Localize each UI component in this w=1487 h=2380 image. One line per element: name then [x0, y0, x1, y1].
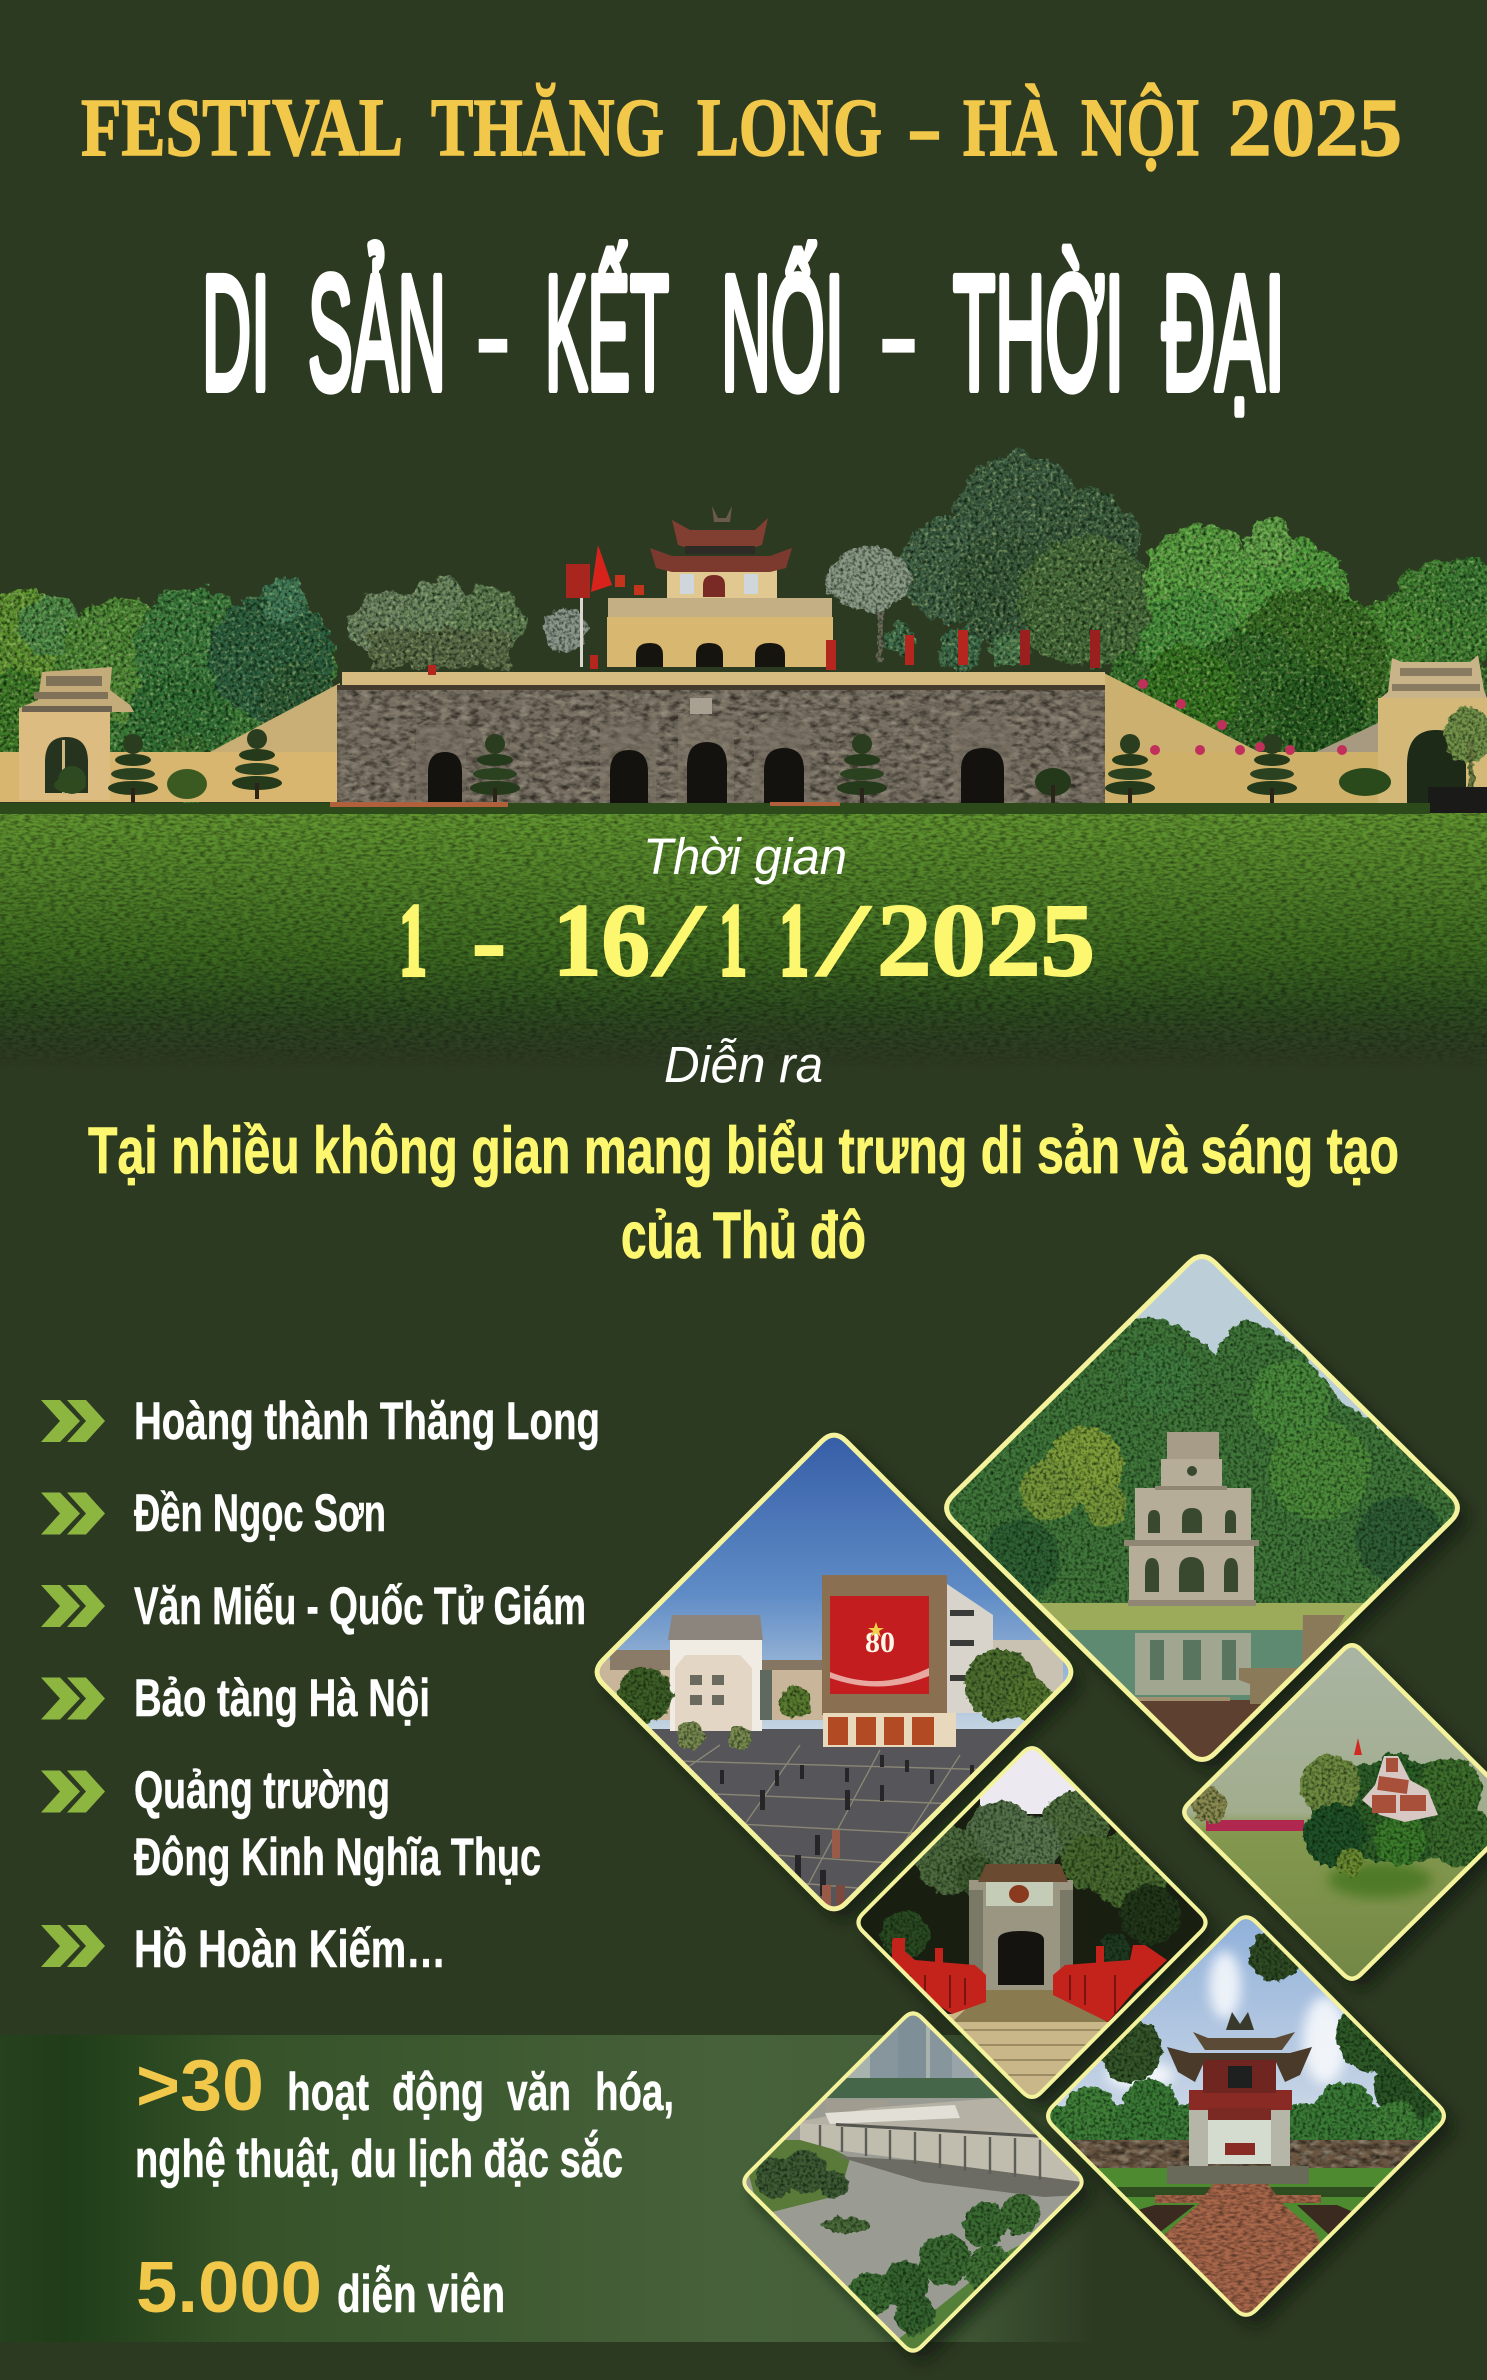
plaza trees	[617, 1649, 1052, 1750]
distant trees	[820, 2078, 1020, 2102]
item: Quảng trường Đông Kinh Nghĩa Thục	[41, 1761, 541, 1887]
pedestrians	[720, 1755, 974, 1896]
stat: 5.000 performers: 5.000	[136, 2248, 322, 2328]
photo diamond: Ngọc Sơn temple island	[1180, 1641, 1487, 1989]
hedge and flower bed	[0, 802, 1430, 814]
heading: Di sản - Kết nối - Thời đại: -	[474, 241, 512, 424]
label: Diễn ra: Diễn ra	[664, 1036, 823, 1093]
museum roof and facade	[800, 2098, 1039, 2137]
photo diamond: Turtle Tower on Hoàn Kiếm lake	[930, 1250, 1480, 1770]
item: Quảng trường Đông Kinh Nghĩa Thục: Quảng trường	[134, 1761, 390, 1820]
photo diamond: Thê Húc bridge and Ngọc Sơn gate	[854, 1744, 1215, 2107]
flags and banners	[428, 545, 1100, 675]
title: Festival Thăng Long - Hà Nội 2025: NỘI	[1081, 81, 1200, 173]
brick wall	[1043, 2140, 1449, 2168]
grass	[1043, 2168, 1449, 2328]
island trees	[1300, 1752, 1487, 1876]
heading: Di sản - Kết nối - Thời đại: DI	[202, 241, 270, 424]
topiary trees	[54, 729, 1391, 804]
photo diamond: Hà Nội Museum	[739, 2002, 1091, 2361]
date: 1 - 16/11/2025: 2025	[877, 883, 1095, 998]
venue statement	[88, 1113, 1399, 1272]
photo diamond: Đông Kinh Nghĩa Thục square	[591, 1429, 1080, 1919]
plaza pavement	[652, 1729, 1016, 1906]
date: 1 - 16/11/2025	[399, 883, 1095, 998]
stat: more than 30 activities: hoạt	[287, 2063, 369, 2122]
stat: 5.000 performers: diễn viên	[337, 2264, 505, 2324]
stats band background	[0, 2035, 1095, 2342]
citadel tower	[607, 506, 833, 667]
illustration: Thăng Long citadel and lawn	[0, 454, 1487, 1068]
date: 1 - 16/11/2025: 1	[779, 883, 809, 998]
tower reflection	[1135, 1633, 1251, 1695]
date: 1 - 16/11/2025: 1	[399, 883, 427, 998]
flags	[1354, 1738, 1362, 1755]
title: Festival Thăng Long - Hà Nội 2025: -	[907, 81, 942, 173]
item: Hồ Hoàn Kiếm: Hồ Hoàn Kiếm…	[134, 1920, 446, 1979]
high-rise towers	[870, 2010, 974, 2080]
stat: more than 30 activities: nghệ thuật, du lịch đặc sắc	[135, 2129, 623, 2189]
stat: more than 30 activities: hóa,	[595, 2063, 674, 2122]
venue statement: của Thủ đô	[621, 1198, 866, 1272]
item: Hoàng thành Thăng Long	[41, 1392, 600, 1451]
heading: Di sản - Kết nối - Thời đại: NỐI	[721, 241, 844, 424]
title: Festival Thăng Long - Hà Nội 2025: THĂNG	[431, 81, 664, 173]
red billboard	[830, 1596, 929, 1694]
dark box on right edge	[1428, 787, 1487, 817]
heading: Di sản - Kết nối - Thời đại	[202, 241, 1285, 424]
date: 1 - 16/11/2025: /	[652, 883, 706, 998]
stat: more than 30 activities: văn	[507, 2063, 571, 2122]
stat: more than 30 activities	[135, 2046, 674, 2189]
bridge deck	[854, 1990, 1210, 2102]
heading: Di sản - Kết nối - Thời đại: KẾT	[545, 241, 669, 424]
palm trees and lawn	[880, 2235, 1040, 2360]
item: Đền Ngọc Sơn	[41, 1484, 386, 1543]
side ramps and low walls	[210, 683, 340, 753]
title: Festival Thăng Long - Hà Nội 2025	[81, 81, 1402, 173]
item: Hoàng thành Thăng Long: Hoàng thành Thăng Long	[134, 1392, 600, 1451]
item: Đền Ngọc Sơn: Đền Ngọc Sơn	[134, 1484, 386, 1543]
item: Bảo tàng Hà Nội	[41, 1669, 430, 1728]
grass and trees on left	[739, 2140, 850, 2215]
magenta lanterns	[1138, 679, 1347, 755]
item: Bảo tàng Hà Nội: Bảo tàng Hà Nội	[134, 1669, 430, 1728]
pale sparse trees	[543, 546, 912, 662]
list of venues	[41, 1392, 600, 1979]
bridge	[1206, 1820, 1304, 1831]
stat: more than 30 activities: động	[392, 2063, 484, 2122]
title: Festival Thăng Long - Hà Nội 2025: FESTIVAL	[81, 81, 403, 173]
title: Festival Thăng Long - Hà Nội 2025: LONG	[697, 81, 882, 173]
red billboard: 80	[865, 1626, 895, 1659]
heading: Di sản - Kết nối - Thời đại: -	[877, 241, 920, 424]
gate	[969, 1880, 1073, 1993]
text: ĐẠI	[1162, 241, 1285, 424]
date: 1 - 16/11/2025: 16	[553, 883, 650, 998]
item: Văn Miếu - Quốc Tử Giám: Văn Miếu - Quốc Tử Giám	[134, 1577, 586, 1636]
turtle tower	[1124, 1432, 1259, 1606]
palm near right gate	[1444, 707, 1487, 795]
title: Festival Thăng Long - Hà Nội 2025: HÀ	[963, 81, 1057, 173]
arched gates in the wall	[428, 742, 1004, 805]
item: Quảng trường Đông Kinh Nghĩa Thục: Đông Kinh Nghĩa Thục	[134, 1828, 541, 1887]
white hotel building right	[947, 1584, 993, 1713]
shop front	[823, 1713, 956, 1747]
temple roofs	[1362, 1756, 1438, 1822]
heading: Di sản - Kết nối - Thời đại: SẢN	[308, 241, 446, 424]
item: Văn Miếu - Quốc Tử Giám	[41, 1577, 586, 1636]
pavilion	[1167, 2166, 1309, 2184]
right gate	[1378, 655, 1487, 803]
trees behind the citadel	[0, 454, 1487, 804]
left gate	[19, 667, 134, 800]
parapet and main wall	[337, 688, 1105, 805]
heading: Di sản - Kết nối - Thời đại: THỜI	[953, 241, 1124, 424]
trees	[1043, 1929, 1449, 2149]
date: 1 - 16/11/2025: /	[816, 883, 871, 998]
red railings	[892, 1938, 1167, 2022]
stat: more than 30 activities: >30	[136, 2046, 264, 2126]
date: 1 - 16/11/2025: -	[472, 883, 506, 998]
low buildings left	[595, 1660, 825, 1720]
foliage	[881, 1791, 1180, 1966]
stat: 5.000 performers	[136, 2248, 505, 2328]
title: Festival Thăng Long - Hà Nội 2025: 2025	[1228, 81, 1402, 173]
date: 1 - 16/11/2025: 1	[719, 883, 747, 998]
brown billboard block	[822, 1575, 947, 1715]
brick path	[1140, 2184, 1350, 2330]
bench	[1239, 1615, 1345, 1704]
label: Thời gian: Thời gian	[643, 828, 847, 885]
photo diamond: Văn Miếu Khuê Văn Các	[1043, 1911, 1453, 2330]
item: Hồ Hoàn Kiếm	[41, 1920, 446, 1979]
lawn	[0, 813, 1487, 1068]
